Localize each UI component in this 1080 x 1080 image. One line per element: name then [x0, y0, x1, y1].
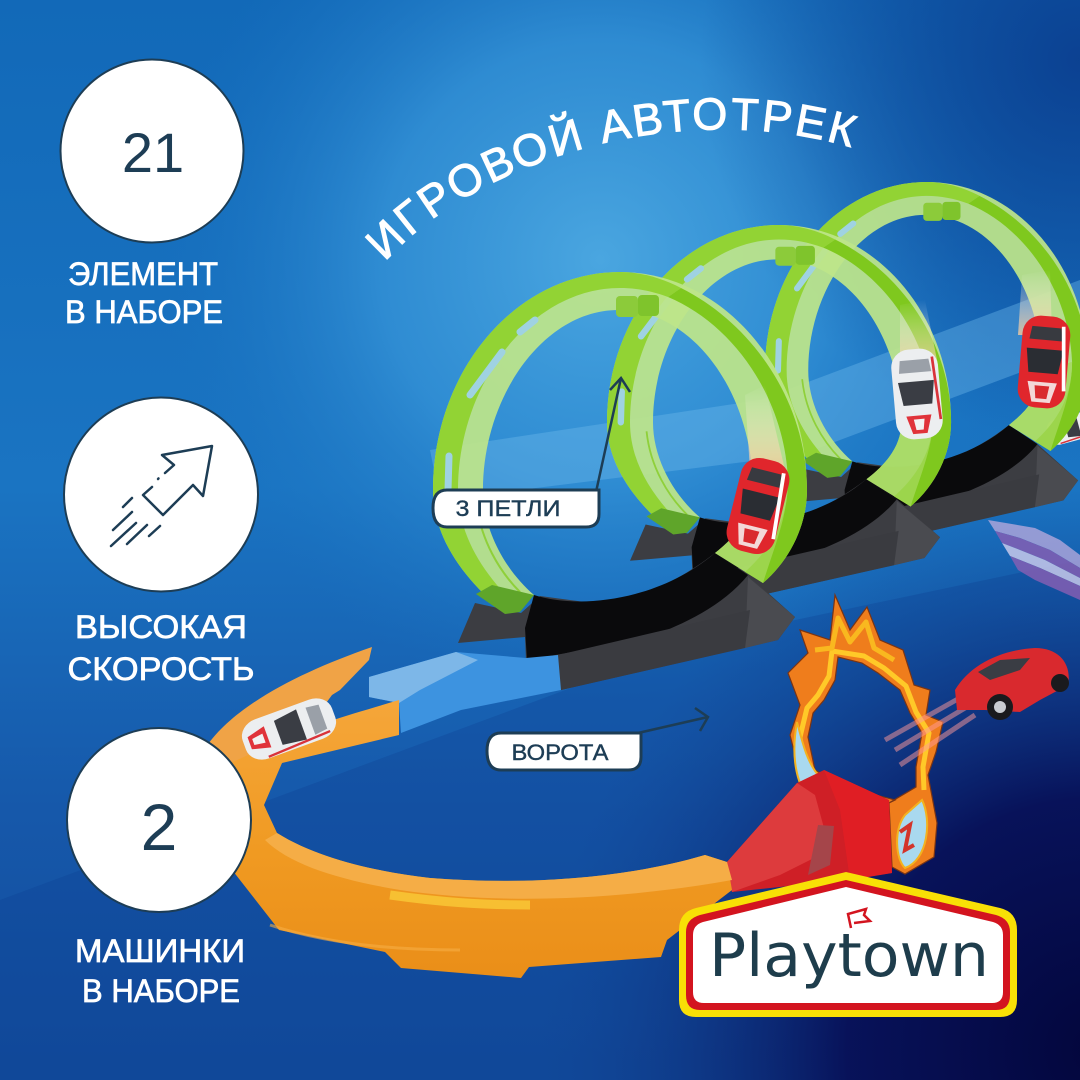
arrow: loops: [596, 378, 630, 492]
stat: 2 cars: В НАБОРЕ: [82, 973, 240, 1009]
arrow: gate: [638, 708, 708, 733]
stat: high speed: [64, 398, 258, 687]
orange track: [200, 647, 732, 978]
callout: gate: [487, 733, 641, 770]
white car on orange track: [237, 693, 341, 765]
white car on loop 2: [890, 300, 944, 441]
blue track: [369, 652, 561, 733]
stat: high speed: СКОРОСТЬ: [68, 651, 254, 687]
logo: Playtown: [679, 872, 1017, 1017]
red ramp: [727, 770, 892, 892]
logo: Playtown: Playtown: [709, 921, 989, 991]
stat: 21 elements: ЭЛЕМЕНТ: [68, 256, 218, 292]
racetrack stripes: [988, 520, 1080, 600]
stat: 2 cars: МАШИНКИ: [75, 933, 245, 969]
white car far right: [1044, 409, 1080, 447]
callout: gate: ВОРОТА: [512, 740, 609, 765]
loop 3: [765, 182, 1080, 544]
stat: 21 elements: В НАБОРЕ: [65, 294, 223, 330]
flame gate: [788, 595, 943, 874]
loop 1: [433, 272, 807, 690]
stat: 21 elements: 21: [122, 121, 184, 184]
stat: 21 elements: [60, 60, 244, 330]
stat: 2 cars: [67, 728, 251, 1009]
red car on loop 1: [723, 385, 793, 558]
flying red car: [885, 648, 1069, 765]
stat: high speed: ВЫСОКАЯ: [75, 609, 247, 645]
title: ИГРОВОЙ АВТОТРЕК: [364, 98, 859, 260]
icon: speed arrow: [111, 446, 212, 546]
stat: 2 cars: 2: [141, 790, 177, 864]
callout: 3 loops: 3 ПЕТЛИ: [456, 496, 560, 521]
red car on loop 3: [1016, 270, 1072, 410]
callout: 3 loops: [433, 490, 599, 527]
loop 2: [607, 225, 951, 603]
